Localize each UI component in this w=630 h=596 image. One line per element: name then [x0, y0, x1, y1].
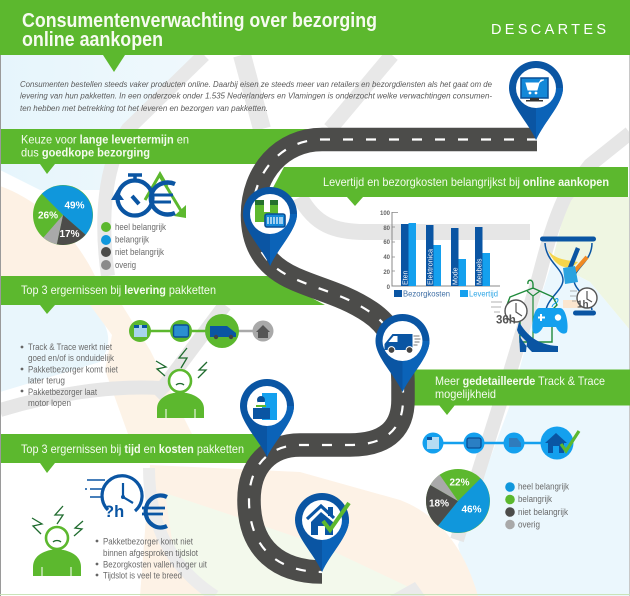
bullets: tijd en kosten: Bezorgkosten vallen hoger uit [103, 560, 207, 570]
bullets: levering: Track & Trace werkt niet [28, 342, 112, 352]
pie chart: keuze: 17% [59, 229, 80, 240]
legend: keuze: heel belangrijk [115, 222, 166, 232]
pin: home delivered [295, 493, 349, 572]
title: Consumentenverwachting over bezorging [22, 10, 377, 32]
bar chart: 40 [383, 255, 391, 261]
bar chart: Levertijd [469, 290, 498, 298]
bullets: levering: Pakketbezorger komt niet [28, 364, 118, 374]
pin: shopping cart [509, 61, 563, 140]
icon: clock with euro: ?h [104, 503, 124, 521]
bar chart [380, 211, 500, 298]
bar chart: Meubels [476, 258, 484, 285]
bar chart: 20 [383, 270, 391, 276]
pie chart: track and trace: 46% [461, 504, 482, 516]
bullets: tijd en kosten: binnen afgesproken tijdslot [103, 548, 198, 558]
band: tijd en kosten [1, 434, 268, 473]
header banner [0, 0, 630, 72]
pin: courier at the door [240, 379, 294, 457]
icon: clock with euro [85, 476, 167, 528]
bar chart: Bezorgkosten [403, 290, 450, 298]
icon: frustrated person [32, 506, 83, 576]
bar chart: 100 [380, 211, 391, 217]
icon: clothing, clock, shoe and game controller: 36h [496, 314, 516, 326]
legend: track and trace: overig [518, 520, 540, 530]
bullets: levering: goed en/of is onduidelijk [28, 353, 114, 363]
bullets: tijd en kosten: Tijdslot is veel te breed [103, 570, 182, 580]
pie chart: track and trace [426, 469, 490, 533]
icon: stopwatch, euro and arrows [111, 174, 186, 218]
icon: clothing, clock, shoe and game controller [491, 280, 568, 352]
bullets: levering: Pakketbezorger laat [28, 387, 97, 397]
band: keuze: Keuze voor lange levertermijn en [21, 132, 189, 146]
band: levertijd: Levertijd en bezorgkosten belangrijkst bij online aankopen [323, 175, 609, 189]
legend: keuze: niet belangrijk [115, 247, 164, 257]
pie chart: keuze: 49% [64, 200, 85, 212]
bullets: levering [21, 342, 118, 408]
legend: track and trace: heel belangrijk [518, 482, 569, 492]
pin: delivery van [376, 314, 430, 392]
band: keuze [1, 129, 315, 174]
intro text: ten hebben met betrekking tot het leveren en bezorgen van pakketten. [20, 103, 268, 113]
pie chart: keuze [33, 185, 93, 245]
bullets: tijd en kosten [96, 536, 207, 580]
legend: track and trace [505, 482, 569, 530]
bar chart: 80 [383, 226, 391, 232]
bar chart: Eten [402, 270, 410, 285]
intro text: levering van hun pakketten. In een onderzoek onder 1.535 Nederlanders en Vlamingen is onderzocht welke verwachtingen consumen- [20, 90, 492, 100]
bullets: tijd en kosten: Pakketbezorger komt niet [103, 536, 193, 546]
band: levering [1, 276, 325, 314]
intro text: Consumenten bestellen steeds vaker producten online. Daarbij eisen ze steeds meer van retailers en bezorgdiensten als het gaat om de [20, 79, 492, 89]
band: track and trace: Meer gedetailleerde Track & Trace [435, 374, 605, 388]
legend: track and trace: niet belangrijk [518, 507, 568, 517]
title [22, 10, 377, 51]
band: keuze: dus goedkope bezorging [21, 146, 150, 160]
tracker: track and trace status [422, 426, 579, 460]
bar chart: 60 [383, 240, 391, 246]
title: online aankopen [22, 29, 163, 51]
pin: package [243, 187, 297, 266]
intro text [20, 79, 492, 113]
band: track and trace [410, 370, 630, 415]
legend: track and trace: belangrijk [518, 494, 552, 504]
legend: keuze: belangrijk [115, 234, 149, 244]
bar chart: Elektronica [428, 249, 434, 285]
icon: frustrated person [156, 348, 207, 418]
band: levering: Top 3 ergernissen bij levering pakketten [21, 283, 216, 297]
road [249, 140, 537, 572]
logo: Descartes: DESCARTES [491, 22, 606, 38]
bullets: levering: motor lopen [28, 398, 71, 408]
bullets: levering: later terug [28, 376, 65, 386]
bar chart: 0 [387, 285, 391, 291]
band: tijd en kosten: Top 3 ergernissen bij tijd en kosten pakketten [21, 442, 244, 456]
legend: keuze [101, 222, 166, 270]
tracker: levering status [129, 314, 274, 348]
pie chart: track and trace: 22% [449, 478, 470, 488]
band: levertijd [268, 167, 628, 206]
icon: hourglass with products: 1h [577, 300, 589, 310]
icon: hourglass with products [540, 236, 597, 316]
pie chart: track and trace: 18% [429, 498, 449, 510]
bar chart: Mode [452, 267, 460, 285]
pie chart: keuze: 26% [38, 210, 58, 222]
legend: keuze: overig [115, 260, 136, 270]
band: track and trace: mogelijkheid [435, 387, 496, 401]
